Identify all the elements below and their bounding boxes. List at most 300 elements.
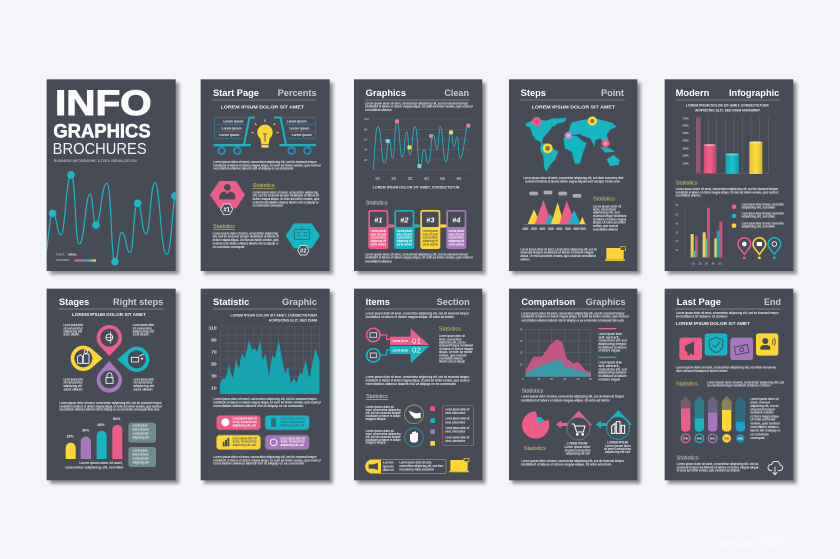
header: Steps bbox=[521, 88, 546, 98]
paragraph: exercitation ullamco bbox=[365, 108, 392, 112]
pink hexagon badge #1 bbox=[210, 181, 245, 215]
pill: yellow bbox=[217, 435, 260, 449]
bottom callout: Lorem ipsum dolor sit amet, bbox=[399, 461, 432, 465]
side text: et dolore magna aliqua bbox=[750, 414, 779, 418]
statistics block 2: Statistics bbox=[213, 224, 235, 230]
font and colors legend bbox=[56, 252, 96, 262]
bottom statistics: Ut enim ad minim veniam, quis nostrud exercitation bbox=[677, 469, 740, 473]
pill: yellow: Lorem ipsum dolor sit bbox=[233, 436, 257, 440]
statistics label: Statistics bbox=[366, 200, 388, 206]
statistics block 1: dolore magna aliqua. Ut enim ad minim veniam, quis bbox=[253, 197, 320, 201]
paragraph: Lorem ipsum dolor sit amet, consectetur adipiscing elit, sed do eiusmod tempor bbox=[213, 160, 317, 164]
line chart: 40 bbox=[424, 176, 429, 181]
chart legend text: sit amet, bbox=[598, 364, 620, 368]
bottom statistics: eiusmod tempor incididunt ut labore et dolore magna aliqua bbox=[677, 465, 759, 469]
heading: LOREM IPSUM DOLOR SIT AMET bbox=[72, 312, 146, 317]
statistics block 1: elit, sed do eiusmod tempor incididunt ut labore et bbox=[253, 194, 319, 198]
area comparison chart: 0 bbox=[522, 377, 524, 381]
double arrow diagram 01 02 bbox=[367, 328, 429, 363]
bottom statistics: Statistics bbox=[677, 456, 699, 462]
3D bar chart: 70% bbox=[683, 116, 689, 120]
tile: person speaking bbox=[756, 333, 778, 356]
bottom paragraph bbox=[365, 252, 473, 263]
3D bar chart: 60% bbox=[683, 124, 689, 128]
page: Items Section bbox=[354, 289, 486, 484]
grouped bar chart: 50 bbox=[719, 262, 722, 266]
card 1: #1 bbox=[374, 216, 382, 225]
statistics paragraph: exercitation ullamco bbox=[676, 194, 701, 198]
grouped bar chart: 20 bbox=[699, 262, 702, 266]
heading: LOREM IPSUM DOLOR SIT AMET bbox=[676, 321, 750, 326]
petal caption top-right: adipiscing elit bbox=[133, 330, 155, 334]
card 2: sed do eiusmod bbox=[397, 242, 412, 246]
chart legend text: adipiscing tempor bbox=[598, 371, 627, 375]
paragraph bbox=[213, 397, 321, 408]
double arrow diagram 01 02: 01 bbox=[412, 336, 421, 345]
petal caption bottom-left: Lorem ipsum dolor bbox=[63, 377, 84, 381]
bottom callout: consectetur adipiscing elit, sed diam bbox=[399, 464, 443, 468]
card 2: consectetur bbox=[397, 236, 413, 240]
statistics paragraph bbox=[521, 388, 625, 402]
area chart bbox=[209, 326, 319, 394]
statistics paragraph: Lorem ipsum dolor sit amet, consectetur adipiscing elit, sed do eiusmod tempor bbox=[521, 395, 625, 399]
petal: purple bbox=[97, 361, 122, 393]
line chart: 40 bbox=[364, 147, 368, 151]
paragraph bbox=[59, 401, 162, 412]
header bbox=[521, 297, 626, 309]
bottom paragraph: Lorem ipsum dolor sit amet, consectetur adipiscing elit, sed do eiusmod tempor bbox=[521, 459, 625, 463]
header: Stages bbox=[59, 297, 89, 307]
statistics paragraph: incididunt ut labore et dolore magna aliqua. Ut enim ad minim veniam, quis nostrud bbox=[676, 190, 778, 194]
legend: Lorem ipsum dolor sit amet, consectetur bbox=[742, 202, 785, 206]
paragraph: Lorem ipsum dolor sit amet, consectetur adipiscing elit, sed do eiusmod tempor bbox=[59, 401, 162, 405]
left cart diagram: Lorem ipsum bbox=[219, 133, 240, 137]
caption right bbox=[604, 441, 632, 454]
statistics text: aliqua. Ut enim ad minim bbox=[593, 221, 626, 225]
petal caption bottom-right: sit consectetur bbox=[133, 381, 153, 385]
bottles icon with teal arrow bbox=[596, 410, 632, 439]
card 3: Lorem ipsum bbox=[423, 229, 438, 233]
tube: purple: 60% bbox=[710, 436, 716, 440]
info cards: consectetur bbox=[133, 432, 149, 436]
card 4: consectetur bbox=[449, 236, 465, 240]
right cart diagram: Lorem ipsum bbox=[287, 120, 307, 124]
legend squares bbox=[430, 406, 435, 446]
3D bar chart bbox=[683, 116, 768, 174]
map caption: Lorem ipsum dolor sit amet, consectetur adipiscing elit, sed diam nonummy nibh bbox=[523, 176, 623, 180]
statistics text: Lorem ipsum dolor sit bbox=[439, 334, 466, 338]
pill: purple: amet, consectetur bbox=[281, 440, 305, 444]
pill: pink: Lorem ipsum dolor sit bbox=[233, 417, 257, 421]
watermark: www.2581.com bbox=[715, 533, 828, 552]
heading: LOREM IPSUM DOLOR SIT AMET bbox=[221, 105, 304, 110]
statistics block 2: nostrud exercitation ullamco laboris nisi ut aliquip ex bbox=[213, 241, 279, 245]
left cart diagram: Lorem ipsum bbox=[223, 120, 244, 124]
paragraph: incididunt ut labore et dolore bbox=[676, 314, 728, 318]
header: Comparison bbox=[521, 297, 576, 307]
cover title: BROCHURES bbox=[53, 141, 147, 158]
middle paragraph bbox=[366, 375, 470, 386]
chart legend text: sit amet, bbox=[598, 335, 620, 339]
paragraph bbox=[676, 311, 779, 318]
location pin icons bbox=[738, 238, 781, 259]
right cart diagram bbox=[274, 118, 316, 154]
side text: Lorem ipsum dolor sit bbox=[750, 397, 779, 401]
statistics text: aliqua. Ut enim ad minim bbox=[439, 350, 472, 354]
side text: adipiscing elit, sed do bbox=[750, 404, 779, 408]
legend bbox=[732, 202, 785, 228]
heading: LOREM IPSUM DOLOR SIT AMET bbox=[532, 105, 615, 110]
bottom statistics bbox=[677, 456, 759, 473]
line chart: 100 bbox=[364, 117, 369, 121]
cover wave line chart bbox=[47, 171, 179, 265]
heading bbox=[686, 103, 769, 112]
bar chart caption: Lorem ipsum dolor sit amet, bbox=[79, 461, 123, 465]
statistics text: exercitation ullamco bbox=[439, 356, 463, 360]
page: Last Page End bbox=[665, 289, 797, 484]
left text blocks: Lorem ipsum dolor sit bbox=[366, 405, 395, 409]
petal caption bottom-left: sit consectetur bbox=[63, 381, 83, 385]
card 4: #4 bbox=[452, 216, 460, 225]
bottom paragraph: exercitation ullamco laboris nisi ut aliquip ex ea commodo bbox=[213, 462, 304, 466]
page: cover INFO GRAPHICS BROCHURES bbox=[47, 79, 179, 274]
outlined list box: Lorem ipsum dolor sit bbox=[445, 426, 470, 430]
icon: laptop bbox=[449, 458, 469, 472]
pill: yellow: amet, consectetur bbox=[233, 440, 257, 444]
grouped bar chart: 20 bbox=[675, 239, 679, 243]
petal caption bottom-left bbox=[63, 377, 84, 391]
paragraph: exercitation ullamco laboris nisi ut aliquip ex ea commodo bbox=[213, 404, 303, 408]
line chart bbox=[364, 117, 470, 181]
left text blocks: Lorem ipsum dolor sit bbox=[366, 429, 395, 433]
header: Last Page bbox=[677, 297, 721, 307]
header: Graphics bbox=[586, 297, 626, 307]
statistics text: amet, consectetur bbox=[593, 208, 617, 212]
chart legend text: Lorem ipsum dolor bbox=[598, 361, 623, 365]
info cards: dolor sit amet bbox=[133, 428, 149, 432]
statistics text: eiusmod tempor incididunt bbox=[439, 344, 474, 348]
caption left: adipiscing elit sed bbox=[566, 451, 590, 455]
chart legend text: Lorem ipsum dolor bbox=[598, 332, 623, 336]
bottom paragraph: Lorem ipsum dolor sit amet, consectetur adipiscing elit, sed do eiusmod tempor bbox=[365, 252, 469, 256]
font and colors legend: FONT: bbox=[56, 252, 65, 256]
paragraph: incididunt ut labore et dolore magna aliqua. Ut enim ad minim bbox=[366, 315, 454, 319]
3D bar chart: 40% bbox=[683, 139, 689, 143]
tile: money bbox=[730, 338, 753, 360]
grouped bar chart: 10 bbox=[675, 248, 679, 252]
left text blocks: incididunt ut labore et dolore bbox=[366, 414, 401, 418]
petal caption top-left: Lorem ipsum dolor bbox=[63, 323, 84, 327]
paragraph: exercitation ullamco laboris nisi ut aliquip ex ea commodo consequat duis aute bbox=[59, 408, 160, 412]
area chart: 110 bbox=[209, 326, 217, 332]
grouped bar chart: 10 bbox=[692, 262, 695, 266]
statistics block 2: ea commodo consequat bbox=[213, 245, 245, 249]
map caption: euismod tincidunt ut laoreet dolore magna aliquam erat volutpat. Ut wisi enim bbox=[525, 180, 620, 184]
paragraph: exercitation ullamco laboris nisi ut aliquip ex ea commodo bbox=[213, 167, 293, 171]
pill: yellow: adipiscing elit, sed bbox=[233, 443, 256, 447]
cover subtitle: BUSINESS INFOGRAPHIC & DATA VISUALIZATION bbox=[54, 159, 137, 163]
grouped bar chart: 40 bbox=[712, 262, 715, 266]
petal caption bottom-left: sed diam bbox=[63, 387, 83, 391]
paragraph: incididunt ut labore et dolore magna aliqua. Ut enim ad minim veniam, quis nostrud bbox=[521, 315, 629, 319]
double arrow diagram 01 02: 02 bbox=[412, 346, 421, 355]
area comparison chart: 10 bbox=[520, 362, 523, 366]
left text blocks: incididunt ut labore et dolore bbox=[366, 438, 401, 442]
statistics row: Statistics bbox=[676, 382, 698, 388]
pill: purple: adipiscing elit, sed bbox=[281, 443, 304, 447]
paragraph bbox=[213, 160, 321, 171]
card 4: Lorem ipsum bbox=[449, 229, 464, 233]
card 2: dolor sit amet bbox=[397, 232, 413, 236]
petal caption top-left bbox=[63, 323, 84, 337]
area comparison chart: 30 bbox=[520, 339, 523, 343]
card 3: dolor sit amet bbox=[423, 232, 439, 236]
paragraph bbox=[365, 101, 473, 112]
area chart: 90 bbox=[211, 338, 217, 344]
middle paragraph: incididunt ut labore et dolore magna aliqua. Ut enim ad minim veniam, quis nostrud bbox=[366, 378, 470, 382]
chart legend text: consectetur elit, sed bbox=[598, 339, 627, 343]
left text blocks: magna aliqua bbox=[366, 440, 386, 444]
outlined list box: amet, consectetur bbox=[445, 420, 466, 424]
petal caption top-right bbox=[133, 323, 155, 337]
caption left: Lorem ipsum dolor bbox=[564, 445, 591, 449]
petal caption bottom-right bbox=[133, 377, 155, 391]
page: Start Page bbox=[201, 79, 333, 274]
percent bar chart: 45% bbox=[97, 423, 105, 427]
bottom paragraph: ullamco bbox=[520, 258, 530, 262]
tube: yellow: 75% bbox=[724, 436, 730, 440]
header bbox=[213, 88, 317, 100]
chart legend text: et dolore magna bbox=[598, 349, 620, 353]
card 1 bbox=[368, 210, 388, 249]
statistics text: veniam, quis nostrud bbox=[439, 353, 466, 357]
pill: teal bbox=[265, 416, 309, 430]
info cards: dolor sit amet bbox=[133, 453, 149, 457]
statistics text: Lorem ipsum dolor sit bbox=[593, 204, 622, 208]
outlined list box: Lorem ipsum dolor sit bbox=[445, 435, 470, 439]
statistics text: Statistics bbox=[439, 326, 461, 332]
cover title: GRAPHICS bbox=[53, 122, 151, 143]
statistics block 2: dolore magna aliqua. Ut enim ad minim veniam, quis bbox=[213, 238, 279, 242]
caption right: sit amet consectetur bbox=[604, 447, 632, 451]
side text: exercitation ullamco bbox=[750, 425, 779, 429]
header: Items bbox=[366, 297, 390, 307]
heading bbox=[230, 314, 318, 323]
statistics block 1 bbox=[253, 183, 320, 208]
area comparison chart: 40 bbox=[577, 377, 580, 381]
left text blocks: magna aliqua bbox=[366, 417, 386, 421]
petal caption bottom-left: adipiscing elit bbox=[63, 384, 83, 388]
card 1: adipiscing elit bbox=[371, 239, 387, 243]
grouped bar chart: 30 bbox=[675, 230, 679, 234]
statistics block 2: elit, sed do eiusmod tempor incididunt ut labore et bbox=[213, 235, 279, 239]
card 2: Lorem ipsum bbox=[397, 229, 412, 233]
page: Modern Infographic bbox=[665, 79, 797, 274]
caption left bbox=[564, 442, 592, 455]
header: End bbox=[764, 297, 781, 307]
paragraph: incididunt ut labore et dolore magna aliqua. Ut enim ad minim veniam, quis nostrud bbox=[213, 400, 321, 404]
statistics text: ut labore et dolore magna bbox=[593, 217, 627, 221]
statistics block 1: Statistics bbox=[253, 183, 275, 189]
bottom callout bbox=[365, 460, 446, 473]
area comparison chart: 20 bbox=[520, 351, 523, 355]
statistics block 1: ea commodo consequat bbox=[253, 204, 283, 208]
statistics text: ut labore et dolore magna bbox=[439, 347, 473, 351]
petal caption top-left: adipiscing elit bbox=[63, 330, 83, 334]
bottom paragraph: Lorem ipsum dolor sit amet, consectetur adipiscing elit, sed do bbox=[520, 247, 597, 251]
statistics paragraph: Statistics bbox=[676, 180, 698, 186]
bottom callout: dolor sit bbox=[383, 468, 394, 472]
side text: veniam, quis nostrud bbox=[750, 421, 780, 425]
percent bar chart: 15% bbox=[66, 435, 74, 439]
bottom paragraph: incididunt ut labore et dolore magna aliqua. Ut enim ad minim bbox=[521, 462, 612, 466]
outlined list box: amet, consectetur bbox=[445, 430, 466, 434]
bar chart caption bbox=[65, 461, 123, 470]
card 1: Lorem ipsum bbox=[371, 229, 386, 233]
percent bar chart bbox=[66, 417, 122, 459]
page: Statistic Graphic bbox=[201, 289, 333, 484]
petal: pink bbox=[97, 325, 122, 356]
petal: teal bbox=[117, 347, 149, 372]
line chart: 60 bbox=[364, 137, 368, 141]
statistics row: do eiusmod tempor incididunt ut labore et dolore bbox=[707, 384, 771, 388]
icon: cloud download bbox=[768, 461, 783, 475]
legend: adipiscing elit, sed diam bbox=[742, 205, 775, 209]
card 2 bbox=[394, 210, 414, 249]
tile: shield bbox=[705, 333, 727, 356]
petal caption bottom-right: Lorem ipsum dolor bbox=[133, 377, 155, 381]
pill: pink: adipiscing elit, sed bbox=[233, 423, 256, 427]
percent bar chart: 30% bbox=[82, 429, 90, 433]
tube: pink: 70% bbox=[683, 436, 689, 440]
statistics text bbox=[439, 326, 474, 363]
heading: LOREM IPSUM DOLOR SIT AMET, CONSECTETUER bbox=[230, 314, 318, 318]
statistics row: Lorem ipsum dolor sit amet, consectetur adipiscing elit, sed bbox=[707, 381, 784, 385]
side text: Ut enim ad minim bbox=[750, 418, 776, 422]
statistics paragraph bbox=[676, 180, 779, 198]
left text blocks bbox=[366, 405, 401, 444]
bottom paragraph: aliqua. Ut enim ad minim veniam, quis nostrud exercitation bbox=[520, 254, 596, 258]
line chart: 60 bbox=[457, 176, 462, 181]
header: Section bbox=[437, 297, 470, 307]
header: Right steps bbox=[113, 297, 163, 307]
statistics row bbox=[676, 381, 784, 388]
header bbox=[676, 297, 781, 309]
pink hexagon badge #1: #1 bbox=[223, 208, 231, 214]
bottom paragraph bbox=[520, 247, 597, 262]
legend: Lorem ipsum dolor sit amet, consectetur bbox=[742, 221, 785, 225]
icon: light bulb bbox=[251, 119, 279, 148]
paragraph: nibh euismod tincidunt ut laoreet dolore bbox=[676, 369, 728, 373]
card 4: sed do eiusmod bbox=[449, 242, 464, 246]
statistics paragraph: incididunt ut labore et dolore magna aliqua. Ut enim ad minim bbox=[521, 398, 610, 402]
header bbox=[365, 297, 470, 309]
statistics text: Statistics bbox=[593, 196, 615, 202]
header: Percents bbox=[278, 88, 317, 98]
header bbox=[365, 88, 470, 100]
card 3: #3 bbox=[426, 216, 434, 225]
area comparison chart bbox=[520, 327, 592, 381]
header bbox=[676, 88, 780, 100]
header bbox=[520, 88, 625, 100]
paragraph: incididunt ut labore et dolore magna aliqua. Ut enim ad minim veniam, quis nostrud bbox=[365, 105, 473, 109]
header: Point bbox=[601, 88, 624, 98]
cart icon with pink arrow bbox=[556, 411, 592, 440]
percent bar chart: 60% bbox=[113, 417, 121, 421]
statistics block 2: Lorem ipsum dolor sit amet, consectetur adipiscing bbox=[213, 231, 278, 235]
right cart diagram: Lorem ipsum bbox=[292, 133, 312, 137]
header: Statistic bbox=[213, 297, 249, 307]
caption right: LOREM IPSUM bbox=[607, 441, 628, 445]
side text: incididunt ut labore bbox=[750, 411, 774, 415]
line chart: 10 bbox=[375, 176, 380, 181]
caption left: sit amet consectetur bbox=[564, 448, 592, 452]
pill: teal: amet, consectetur bbox=[281, 420, 305, 424]
pill: teal: Lorem ipsum dolor sit bbox=[281, 417, 305, 421]
icon tiles bbox=[679, 333, 778, 360]
page: Comparison Graphics bbox=[509, 289, 641, 484]
card 4: dolor sit amet bbox=[449, 232, 465, 236]
four petal diagram bbox=[71, 325, 149, 393]
side text: ea commodo bbox=[750, 432, 769, 436]
3D bar chart: 10% bbox=[683, 161, 689, 165]
side text: eiusmod tempor bbox=[750, 407, 776, 411]
statistics block 2 bbox=[213, 224, 279, 249]
chart legend text: incididunt ut labore bbox=[598, 345, 627, 349]
petal caption top-left: sed diam bbox=[63, 333, 80, 337]
pill: pink bbox=[217, 416, 260, 430]
area comparison chart: 40 bbox=[520, 327, 523, 331]
header bbox=[213, 297, 317, 309]
paragraph: Lorem ipsum dolor sit amet, consectetur adipiscing elit, sed do eiusmod tempor bbox=[366, 312, 470, 316]
legend: adipiscing elit, sed diam bbox=[742, 224, 775, 228]
area comparison chart: 10 bbox=[537, 377, 541, 381]
line chart: 80 bbox=[364, 127, 368, 131]
statistics block 1: nostrud exercitation ullamco laboris nisi ut aliquip ex bbox=[253, 200, 319, 204]
pill: teal: adipiscing elit, sed bbox=[281, 423, 304, 427]
pill: purple bbox=[265, 435, 309, 449]
font and colors legend: COLORS: bbox=[56, 258, 70, 262]
card 1: consectetur bbox=[371, 236, 387, 240]
petal caption bottom-right: adipiscing elit bbox=[133, 384, 155, 388]
petal caption top-left: sit consectetur bbox=[63, 326, 83, 330]
area comparison chart: 50 bbox=[589, 377, 592, 381]
area chart: 30 bbox=[211, 373, 217, 379]
card 4: adipiscing elit bbox=[449, 239, 465, 243]
middle paragraph: Lorem ipsum dolor sit amet, consectetur adipiscing elit, sed do eiusmod tempor bbox=[366, 375, 470, 379]
3D bar chart: 50% bbox=[683, 131, 689, 135]
3D bar chart: 20% bbox=[683, 154, 689, 158]
double arrow diagram 01 02: Lorem ipsum bbox=[393, 348, 408, 352]
side text: laboris nisi ut aliquip ex bbox=[750, 429, 781, 433]
outlined list box: Lorem ipsum dolor sit bbox=[445, 407, 470, 411]
statistics text: amet, consectetur bbox=[439, 337, 462, 341]
heading: ADIPISCING ELIT, SED DIAM bbox=[269, 319, 317, 323]
petal caption top-right: Lorem ipsum dolor bbox=[133, 323, 155, 327]
area comparison chart: 20 bbox=[550, 377, 553, 381]
heading: ADIPISCING ELIT, SED DIAM NONUMMY bbox=[695, 108, 761, 112]
left text blocks: elit, sed do eiusmod tempor bbox=[366, 435, 401, 439]
outlined list box: amet, consectetur bbox=[445, 439, 466, 443]
map caption bbox=[523, 176, 623, 184]
caption right: adipiscing elit sed bbox=[605, 450, 630, 454]
caption right: Lorem ipsum dolor bbox=[605, 444, 632, 448]
line chart: 50 bbox=[440, 176, 446, 181]
left cart diagram bbox=[213, 118, 255, 154]
bottom paragraph bbox=[213, 455, 321, 466]
middle paragraph: exercitation ullamco laboris nisi ut aliquip ex ea commodo bbox=[366, 382, 456, 386]
tube gauge chart bbox=[681, 396, 745, 443]
